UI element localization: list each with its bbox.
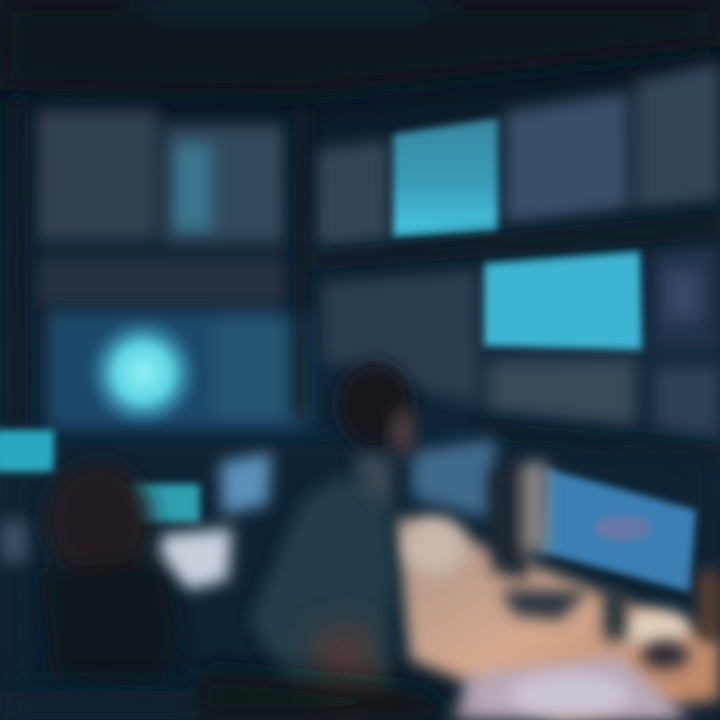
ceiling bbox=[0, 0, 720, 95]
person: central operator bbox=[250, 361, 416, 705]
person: left operator bbox=[40, 462, 180, 690]
foreground dark bbox=[0, 670, 470, 720]
monitor: main blue bbox=[540, 468, 696, 592]
left monitor and paper bbox=[0, 452, 272, 590]
wall dividers bbox=[6, 100, 720, 470]
video wall: right section bbox=[316, 62, 720, 445]
neck and collar bbox=[352, 455, 392, 510]
papers on desk bbox=[403, 515, 691, 720]
cyan screens bbox=[393, 118, 642, 350]
low teal screen bbox=[130, 484, 200, 522]
arm bbox=[310, 620, 385, 705]
desk bbox=[395, 515, 720, 720]
lower desk area shading bbox=[0, 445, 720, 720]
head bbox=[337, 361, 413, 449]
glowing circle screen bbox=[87, 317, 199, 429]
monitor: side and stand bbox=[488, 462, 720, 669]
left cyan screen bbox=[0, 430, 54, 472]
face bbox=[390, 408, 416, 456]
monitor: back bbox=[412, 438, 496, 520]
body bbox=[250, 476, 392, 690]
video wall: left section bbox=[36, 110, 310, 430]
